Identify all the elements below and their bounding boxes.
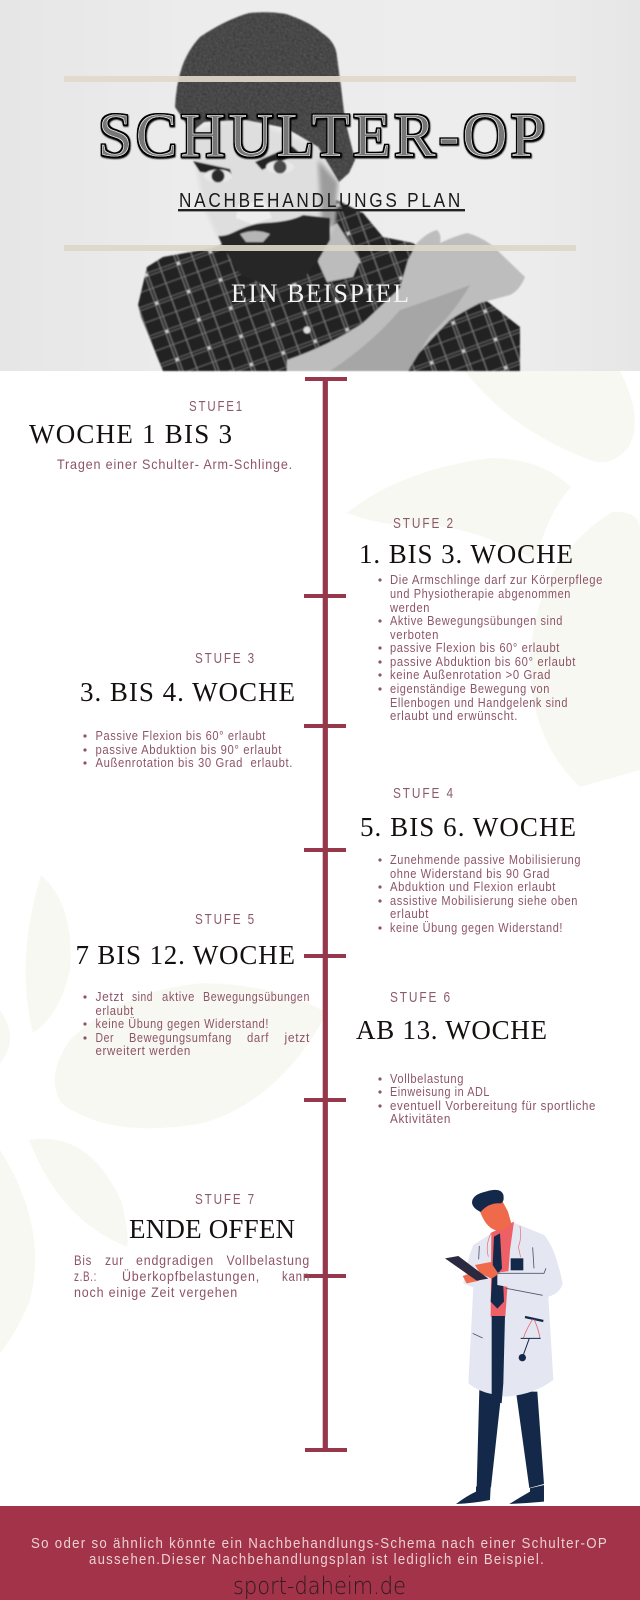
- bullet list: assistive Mobilisierung siehe oben: [390, 893, 578, 908]
- stufe label: STUFE 6: [390, 989, 452, 1006]
- shirt: [491, 1222, 514, 1317]
- description: z.B.:: [74, 1268, 97, 1284]
- footer note: aussehen.Dieser Nachbehandlungsplan ist lediglich ein Beispiel.: [89, 1552, 545, 1568]
- stufe label: STUFE 3: [195, 650, 256, 667]
- heading: 5. BIS 6. WOCHE: [360, 812, 576, 842]
- shoes: [456, 1485, 544, 1504]
- tie: [491, 1233, 504, 1309]
- coat lines: [473, 1246, 546, 1338]
- face: [479, 1202, 511, 1231]
- footer note: [31, 1536, 608, 1568]
- bullet list: keine Übung gegen Widerstand!: [96, 1016, 269, 1031]
- panel: stufe 7: [74, 1191, 310, 1300]
- footer band: [0, 1506, 640, 1600]
- panel: stufe 3: [80, 650, 295, 770]
- example label: EIN BEISPIEL: [231, 279, 409, 308]
- shirt button: [304, 326, 310, 334]
- decorative rule bottom: [64, 245, 576, 251]
- bullet list: erlaubt: [96, 1003, 134, 1018]
- heading: 3. BIS 4. WOCHE: [80, 677, 295, 707]
- heading: WOCHE 1 BIS 3: [29, 419, 232, 449]
- bullet list: passive Abduktion bis 90° erlaubt: [96, 742, 282, 757]
- stethoscope: [519, 1317, 543, 1361]
- sleeve: [497, 1267, 563, 1295]
- decorative rule top: [64, 76, 576, 82]
- panel: stufe 6: [356, 989, 596, 1126]
- badge: [511, 1258, 523, 1270]
- hair: [472, 1190, 504, 1212]
- lab coat: [463, 1223, 563, 1397]
- neck: [318, 223, 360, 282]
- bullet list: werden: [389, 600, 430, 615]
- bullet list: sind: [132, 989, 153, 1004]
- description: endgradigen: [136, 1252, 214, 1268]
- bullet list: keine Übung gegen Widerstand!: [390, 920, 563, 935]
- description: Tragen einer Schulter- Arm-Schlinge.: [57, 456, 293, 472]
- bullet list: jetzt: [284, 1030, 310, 1045]
- legs: [477, 1390, 544, 1488]
- lapels: [487, 1226, 521, 1257]
- subtitle: NACHBEHANDLUNGS PLAN: [179, 190, 463, 212]
- bullet list: [83, 728, 293, 770]
- trousers between coat: [492, 1316, 505, 1403]
- bullet list: Der: [96, 1030, 114, 1045]
- beanie: [175, 12, 355, 182]
- bullet list: Die Armschlinge darf zur Körperpflege: [390, 572, 603, 587]
- bullet list: eventuell Vorbereitung für sportliche: [390, 1098, 596, 1113]
- bullet list: aktive: [162, 989, 195, 1004]
- stufe label: STUFE 4: [393, 785, 455, 802]
- bullet list: Aktive Bewegungsübungen sind: [390, 613, 563, 628]
- panel: stufe 2: [359, 515, 603, 723]
- hands: [463, 1262, 499, 1283]
- description: Bis: [74, 1252, 92, 1268]
- panel: stufe 1: [29, 398, 293, 472]
- bullet list: erlaubt: [390, 906, 429, 921]
- panel: stufe 4: [360, 785, 581, 935]
- bullet list: [83, 989, 310, 1058]
- bullet list: Abduktion und Flexion erlaubt: [390, 879, 556, 894]
- bullet list: erlaubt und erwünscht.: [390, 708, 518, 723]
- bullet list: passive Flexion bis 60° erlaubt: [390, 640, 560, 655]
- website: sport-daheim.de: [233, 1572, 406, 1600]
- title: SCHULTER-OP: [98, 102, 545, 170]
- bullet list: Jetzt: [96, 989, 124, 1004]
- heading: 7 BIS 12. WOCHE: [76, 940, 295, 970]
- bullet list: und Physiotherapie abgenommen: [390, 586, 571, 601]
- background leaves: [0, 371, 640, 1353]
- bullet list: eigenständige Bewegung von: [390, 681, 550, 696]
- description: kann: [282, 1268, 310, 1284]
- bullet list: [378, 852, 581, 935]
- eyes and brows: [193, 146, 300, 176]
- bullet list: ohne Widerstand bis 90 Grad: [390, 866, 550, 881]
- tablet: [445, 1256, 488, 1281]
- bullet list: Vollbelastung: [390, 1071, 464, 1086]
- bullet list: Bewegungsumfang: [129, 1030, 232, 1045]
- stufe label: STUFE 5: [195, 911, 256, 928]
- bullet list: Aktivitäten: [390, 1111, 451, 1126]
- bullet list: keine Außenrotation >0 Grad: [390, 667, 551, 682]
- arm and hand: [287, 230, 525, 371]
- bullet list: Bewegungsübungen: [203, 989, 310, 1004]
- stufe label: STUFE 7: [195, 1191, 256, 1208]
- face: [190, 118, 337, 262]
- bullet list: Ellenbogen und Handgelenk sind: [390, 695, 568, 710]
- cheek shadow: [318, 160, 338, 228]
- hero photo: man holding his shoulder: [0, 0, 640, 371]
- heading: ENDE OFFEN: [129, 1214, 295, 1244]
- stufe label: STUFE 2: [393, 515, 455, 532]
- icon: doctor with tablet: [445, 1190, 563, 1504]
- description: [74, 1252, 310, 1300]
- stufe label: STUFE1: [189, 398, 244, 415]
- bullet list: darf: [247, 1030, 269, 1045]
- bullet list: Außenrotation bis 30 Grad erlaubt.: [96, 755, 293, 770]
- description: Überkopfbelastungen,: [122, 1267, 260, 1284]
- description: zur: [105, 1252, 124, 1268]
- bullet list: passive Abduktion bis 60° erlaubt: [390, 654, 576, 669]
- lips and nose: [240, 231, 270, 242]
- timeline: [304, 377, 347, 1452]
- shirt: [138, 200, 520, 371]
- panel: stufe 5: [76, 911, 310, 1058]
- beard: [218, 215, 330, 289]
- bullet list: erweitert werden: [96, 1043, 191, 1058]
- bullet list: Passive Flexion bis 60° erlaubt: [96, 728, 266, 743]
- bullet list: Zunehmende passive Mobilisierung: [390, 852, 581, 867]
- bullet list: [378, 572, 603, 723]
- description: Vollbelastung: [226, 1252, 310, 1268]
- bullet list: verboten: [390, 627, 439, 642]
- heading: AB 13. WOCHE: [356, 1015, 547, 1045]
- bullet list: [378, 1071, 596, 1126]
- heading: 1. BIS 3. WOCHE: [359, 539, 573, 569]
- description: noch einige Zeit vergehen: [74, 1284, 238, 1300]
- bullet list: Einweisung in ADL: [390, 1084, 490, 1099]
